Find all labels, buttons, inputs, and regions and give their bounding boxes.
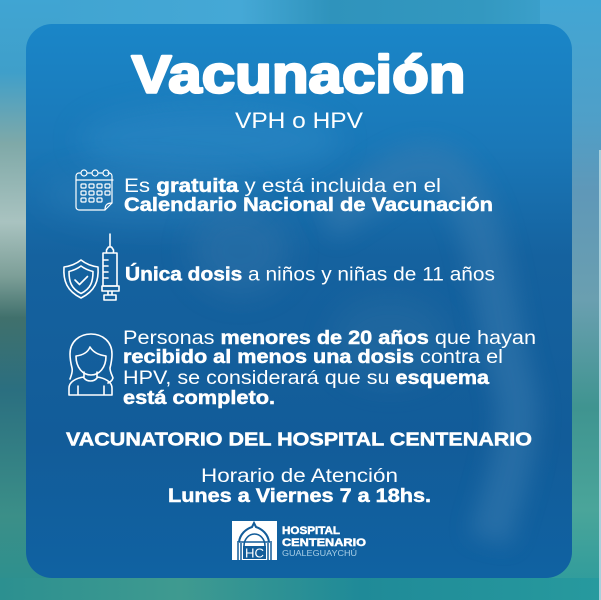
- logo: Hospital Centenario: [232, 521, 367, 560]
- logo: Hospital Centenario: GUALEGUAYCHÚ: [282, 549, 357, 558]
- text block: under 20: [123, 328, 536, 409]
- text block: under 20: Personas menores de 20 años que hayan: [123, 328, 536, 349]
- text block: under 20: recibido al menos una dosis contra el: [123, 347, 503, 368]
- text block: under 20: está completo.: [123, 388, 275, 409]
- subtitle: VPH o HPV: [235, 108, 363, 133]
- icon: calendar: [76, 170, 113, 210]
- text block: single dose: Única dosis a niños y niñas de 11 años: [125, 264, 495, 286]
- icon: person: [69, 334, 113, 395]
- heading: vaccination center: VACUNATORIO DEL HOSPITAL CENTENARIO: [66, 430, 532, 450]
- text block: opening hours: Lunes a Viernes 7 a 18hs.: [168, 486, 431, 507]
- text block: free vaccine: Es gratuita y está incluida en el: [124, 176, 441, 197]
- text block: free vaccine: Calendario Nacional de Vacunación: [124, 195, 493, 216]
- text block: opening hours: Horario de Atención: [201, 466, 398, 487]
- text block: under 20: HPV, se considerará que su esquema: [123, 368, 489, 389]
- logo: Hospital Centenario: HOSPITAL: [282, 525, 340, 537]
- text block: opening hours: [168, 466, 431, 507]
- title: Vacunación: [132, 46, 466, 104]
- text block: free vaccine: [124, 176, 493, 216]
- icon: shield and syringe: [64, 234, 119, 300]
- logo: Hospital Centenario: CENTENARIO: [282, 537, 367, 549]
- logo: Hospital Centenario: HC: [245, 546, 264, 560]
